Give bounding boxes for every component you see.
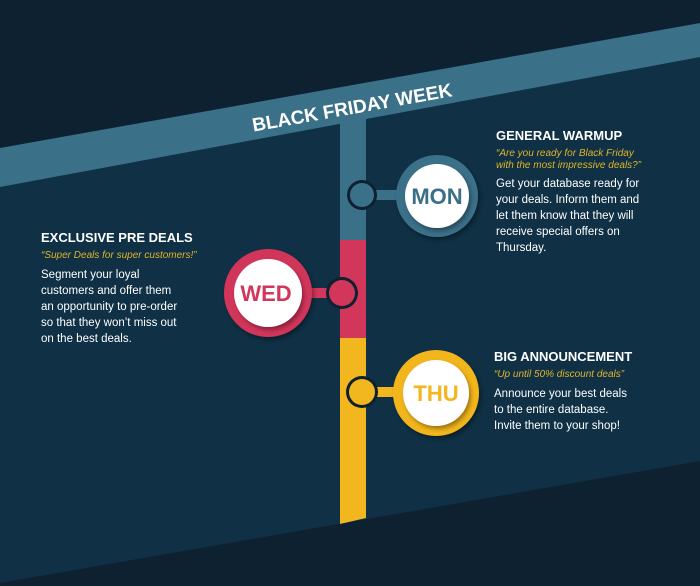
text block: exclusive pre deals: “Super Deals for super customers!” [41,250,197,261]
text block: big announcement [494,349,632,432]
text block: big announcement: Announce your best deals [494,388,627,400]
node: THU: THU [413,381,459,406]
text block: big announcement: “Up until 50% discount deals” [494,369,625,380]
text block: general warmup: let them know that they will [496,210,633,222]
text block: general warmup: “Are you ready for Black Friday [496,148,635,159]
text block: exclusive pre deals [41,230,197,345]
text block: big announcement: to the entire database. [494,404,608,416]
text block: general warmup: with the most impressive deals?” [496,160,642,171]
node: MON: MON [411,184,463,209]
node: WED [224,249,358,337]
title band [0,23,700,187]
node: MON [347,155,478,237]
text block: exclusive pre deals: Segment your loyal [41,269,139,281]
node: THU [346,350,479,436]
text block: general warmup: receive special offers on [496,226,620,238]
node: WED: WED [240,281,292,306]
text block: general warmup: Get your database ready for [496,178,639,190]
text block: exclusive pre deals: an opportunity to pre-order [41,301,177,313]
title: BLACK FRIDAY WEEK [251,80,454,137]
text block: big announcement: BIG ANNOUNCEMENT [494,349,632,364]
timeline stem [340,110,366,524]
text block: general warmup [496,128,642,254]
text block: exclusive pre deals: so that they won’t miss out [41,317,177,329]
text block: exclusive pre deals: EXCLUSIVE PRE DEALS [41,230,193,245]
text block: exclusive pre deals: customers and offer them [41,285,171,297]
text block: general warmup: your deals. Inform them and [496,194,639,206]
text block: exclusive pre deals: on the best deals. [41,333,132,345]
text block: general warmup: GENERAL WARMUP [496,128,622,143]
text block: big announcement: Invite them to your shop! [494,420,620,432]
text block: general warmup: Thursday. [496,242,546,254]
